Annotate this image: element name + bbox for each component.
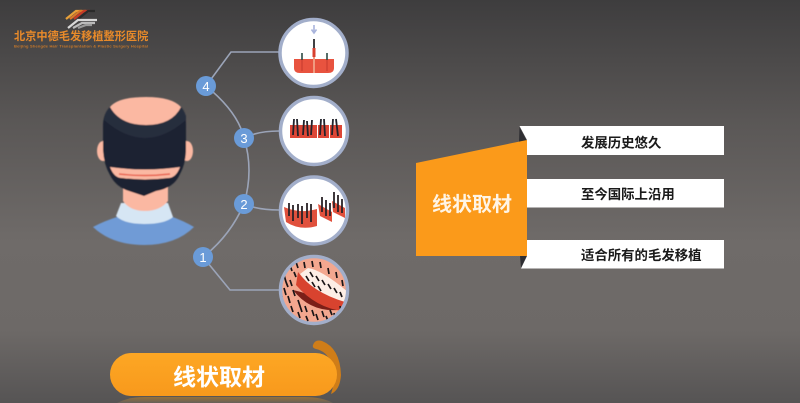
pill accent arc — [313, 340, 341, 394]
icon: step 3 trimmed grafts — [280, 98, 348, 164]
badge 2 — [234, 194, 254, 214]
icon: logo stripes — [66, 11, 97, 28]
connector lines — [203, 52, 279, 290]
incision line — [119, 174, 170, 176]
icon: step 1 strip excision — [280, 256, 348, 324]
bar: suitable for all: 适合所有的毛发移植 — [581, 247, 702, 263]
pill body — [110, 353, 337, 396]
head illustration — [93, 97, 194, 245]
logo subtitle: Beijing Shengde Hair Transplantation & Plastic Surgery Hospital — [14, 44, 148, 48]
pill label: 线状取材 — [173, 364, 265, 390]
hair — [103, 97, 186, 196]
collar — [116, 203, 173, 224]
bald crown — [110, 97, 181, 125]
icon: step 2 cut strip — [280, 177, 348, 244]
orange panel: 线状取材 — [432, 193, 512, 216]
graft block — [294, 59, 334, 73]
arrow — [312, 25, 316, 33]
bar: suitable for all — [521, 240, 724, 268]
opened scalp — [300, 268, 348, 303]
bar: history — [520, 126, 724, 155]
badge 4: 4 — [202, 79, 210, 94]
fold: bottom — [520, 256, 527, 268]
red strip — [296, 272, 345, 311]
pill reflection — [117, 397, 333, 403]
badge 1 — [193, 247, 213, 267]
fold: top — [519, 127, 527, 142]
hairs — [280, 261, 343, 321]
ears — [97, 141, 109, 161]
icon: step 4 implanting graft — [280, 20, 347, 86]
dark wound layer — [293, 290, 338, 310]
bar: still in use: 至今国际上沿用 — [581, 186, 675, 202]
orange panel — [416, 140, 527, 256]
logo — [14, 11, 148, 48]
shoulders — [93, 216, 194, 245]
bar: still in use — [527, 179, 724, 208]
badge 2: 2 — [240, 197, 248, 212]
badge 4 — [196, 76, 216, 96]
neck — [123, 185, 168, 211]
logo title: 北京中德毛发移植整形医院 — [14, 29, 148, 43]
title pill — [110, 340, 341, 403]
badge 1: 1 — [199, 250, 207, 265]
badge 3: 3 — [240, 131, 248, 146]
hair shading — [104, 107, 186, 138]
bar: history: 发展历史悠久 — [581, 134, 662, 150]
needle and stems — [313, 39, 315, 48]
donor strip — [110, 167, 180, 180]
badge 3 — [234, 128, 254, 148]
